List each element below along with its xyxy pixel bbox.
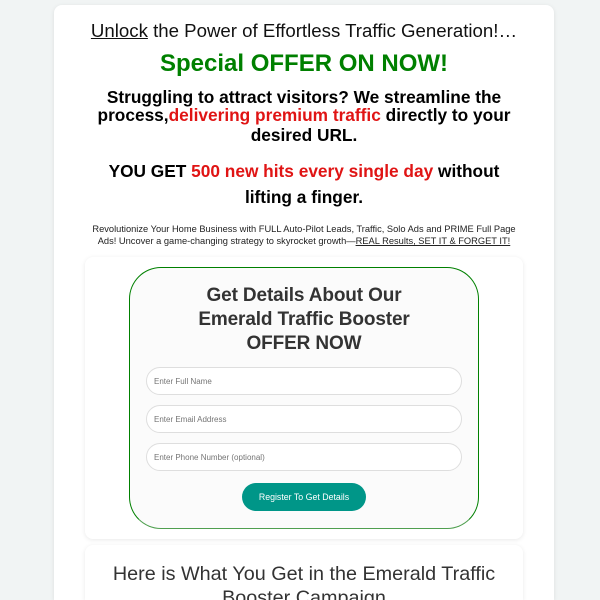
- subheading: struggling to attract visitors: desired URL.: [251, 125, 357, 145]
- text block: revolutionize: [92, 224, 516, 246]
- heading: what you get: Here is What You Get in the Emerald Traffic: [113, 563, 495, 585]
- input: phone: [146, 443, 462, 471]
- subheading: struggling to attract visitors: [98, 87, 510, 145]
- subheading: struggling to attract visitors: process,delivering premium traffic directly to your: [98, 104, 510, 124]
- subheading: you get 500 new hits: [109, 161, 500, 207]
- heading: unlock the power: Unlock the Power of Effortless Traffic Generation!…: [91, 20, 517, 41]
- form heading: Emerald Traffic Booster: [198, 309, 410, 330]
- subheading: struggling to attract visitors: Struggling to attract visitors? We streamline the: [107, 87, 501, 107]
- heading: special offer: Special OFFER ON NOW!: [160, 50, 448, 77]
- subheading: you get 500 new hits: lifting a finger.: [245, 187, 363, 207]
- heading: what you get: [113, 563, 495, 600]
- button: register: [242, 483, 366, 511]
- input: full name: Enter Full Name: [154, 377, 212, 386]
- panel: signup form: [129, 267, 479, 529]
- text block: revolutionize: Revolutionize Your Home Business with FULL Auto-Pilot Leads, Traffic, Solo Ads and PRIME Full Page: [92, 224, 516, 234]
- button: register: Register To Get Details: [259, 492, 349, 502]
- panel: form card: [85, 257, 523, 539]
- input: full name: [146, 367, 462, 395]
- subheading: you get 500 new hits: YOU GET 500 new hits every single day without: [109, 161, 499, 181]
- form heading: [198, 285, 410, 354]
- input: phone: Enter Phone Number (optional): [154, 453, 265, 462]
- form heading: OFFER NOW: [247, 333, 361, 354]
- text block: revolutionize: Ads! Uncover a game-changing strategy to skyrocket growth—REAL Results, SET IT & FORGET IT!: [98, 236, 510, 246]
- panel: what you get: [85, 545, 523, 600]
- input: email: Enter Email Address: [154, 415, 226, 424]
- form heading: Get Details About Our: [206, 285, 402, 306]
- input: email: [146, 405, 462, 433]
